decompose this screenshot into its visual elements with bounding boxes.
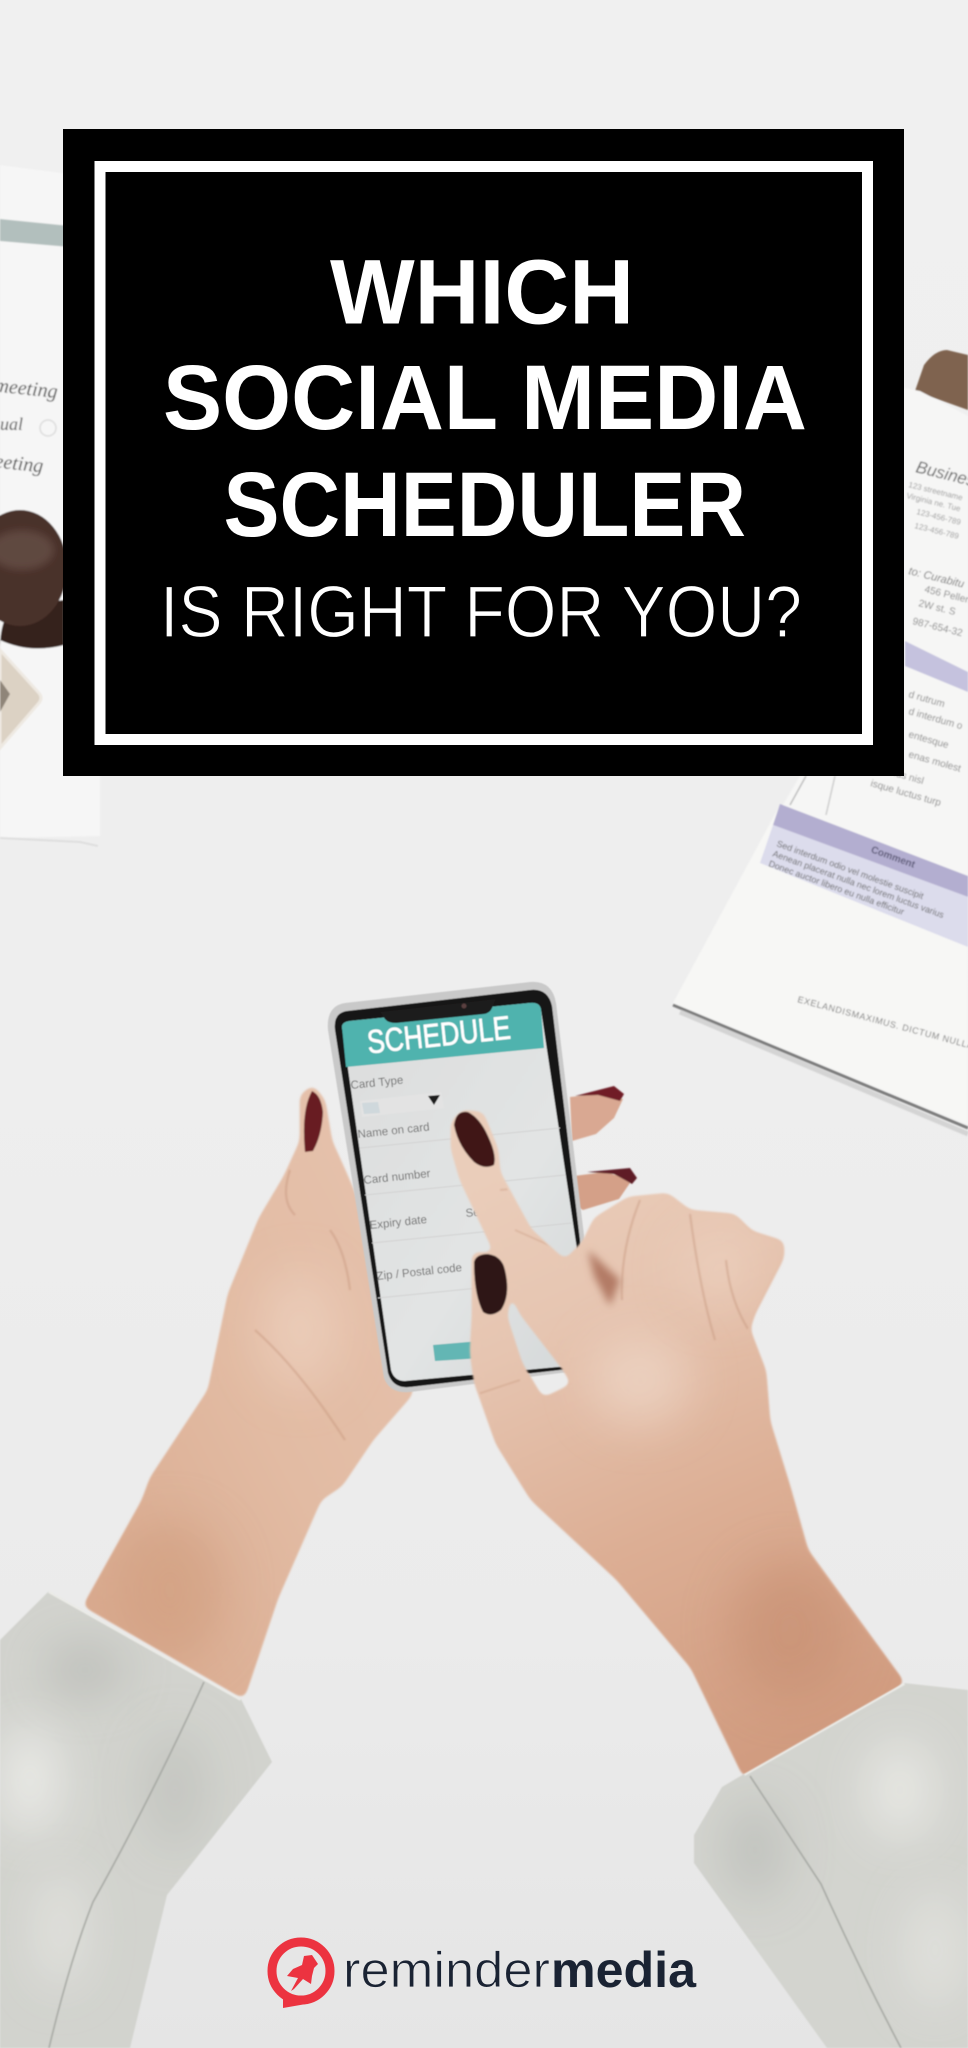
photo: right paperwork: 123-456-789 xyxy=(916,507,962,527)
title text: SOCIAL MEDIA xyxy=(163,347,807,449)
lavender comment band xyxy=(773,804,968,897)
title text: WHICH xyxy=(330,242,634,344)
index finger nail xyxy=(454,1112,495,1167)
photo: right paperwork: isque luctus turp xyxy=(869,778,943,809)
schedule label: SCHEDULE xyxy=(365,1009,512,1060)
photo: right paperwork: d rutrum xyxy=(907,689,946,710)
photo: right paperwork: Virginia ne. Tue xyxy=(906,491,962,513)
logo: remindermedia xyxy=(272,1942,697,2008)
photo: right paperwork: 2W st. S xyxy=(917,598,957,618)
photo: left paperwork xyxy=(0,165,100,846)
form fields: Expiry date xyxy=(369,1214,428,1232)
photo: left hand holding phone xyxy=(83,1085,413,1699)
icon: red speech bubble with push pin xyxy=(272,1942,330,2008)
photo: right paperwork: enas molest xyxy=(907,749,962,775)
thumb nail xyxy=(304,1091,323,1152)
photo: right paperwork: Sed interdum odio vel molestie suscipit xyxy=(775,838,925,901)
photo: right paperwork xyxy=(673,350,968,1134)
photo: right paperwork: Aenean placerat nulla nec lorem luctus varius xyxy=(771,848,946,920)
wordmark: reminder xyxy=(343,1942,550,1998)
logo: remindermedia: media xyxy=(551,1942,697,1998)
brown folder tab xyxy=(915,350,968,410)
photo: right paperwork: Donec auctor libero eu nulla efficitur xyxy=(767,858,906,917)
shaded finger behind fist xyxy=(588,1250,620,1306)
phone screen xyxy=(342,1003,590,1381)
photo: right paperwork: 987-654-32 xyxy=(911,616,964,639)
form fields: Se xyxy=(465,1207,480,1220)
teal header xyxy=(342,1003,544,1067)
thumb nail xyxy=(474,1254,507,1315)
form fields: Zip / Postal code xyxy=(376,1262,463,1283)
photo: right paperwork: 123 streetname xyxy=(908,480,964,503)
photo: right paperwork: 123-456-789 xyxy=(914,521,960,541)
photo: left sleeve xyxy=(0,1591,272,2048)
upper invoice sheet xyxy=(780,388,968,900)
lavender band upper sheet xyxy=(905,641,968,692)
photo: fingers behind the phone xyxy=(570,1086,637,1210)
title panel: black box xyxy=(63,129,904,776)
sheet shadow xyxy=(673,1005,968,1128)
white inner frame xyxy=(100,166,868,740)
title text: IS RIGHT FOR YOU? xyxy=(160,572,802,653)
photo: right paperwork: Comment xyxy=(869,845,917,871)
teal button xyxy=(433,1341,482,1361)
phone showing schedule form xyxy=(328,982,600,1392)
photo: right sleeve xyxy=(694,1683,968,2048)
form fields: Card Type xyxy=(350,1075,404,1092)
photo: right hand tapping phone xyxy=(451,1110,905,1778)
title text xyxy=(160,242,807,653)
lower invoice sheet xyxy=(673,805,968,1125)
photo: left paperwork: ual xyxy=(0,414,23,434)
photo: right paperwork: to: Curabitu xyxy=(907,565,965,591)
form fields xyxy=(350,1075,480,1283)
title text: SCHEDULER xyxy=(224,454,746,556)
notch xyxy=(380,999,496,1023)
form fields: Card number xyxy=(363,1168,431,1187)
form fields: Name on card xyxy=(357,1121,430,1141)
photo: right paperwork: varius nisl xyxy=(879,764,925,787)
photo: right paperwork: d interdum o xyxy=(907,706,964,732)
photo: right paperwork: entesque xyxy=(907,729,950,751)
